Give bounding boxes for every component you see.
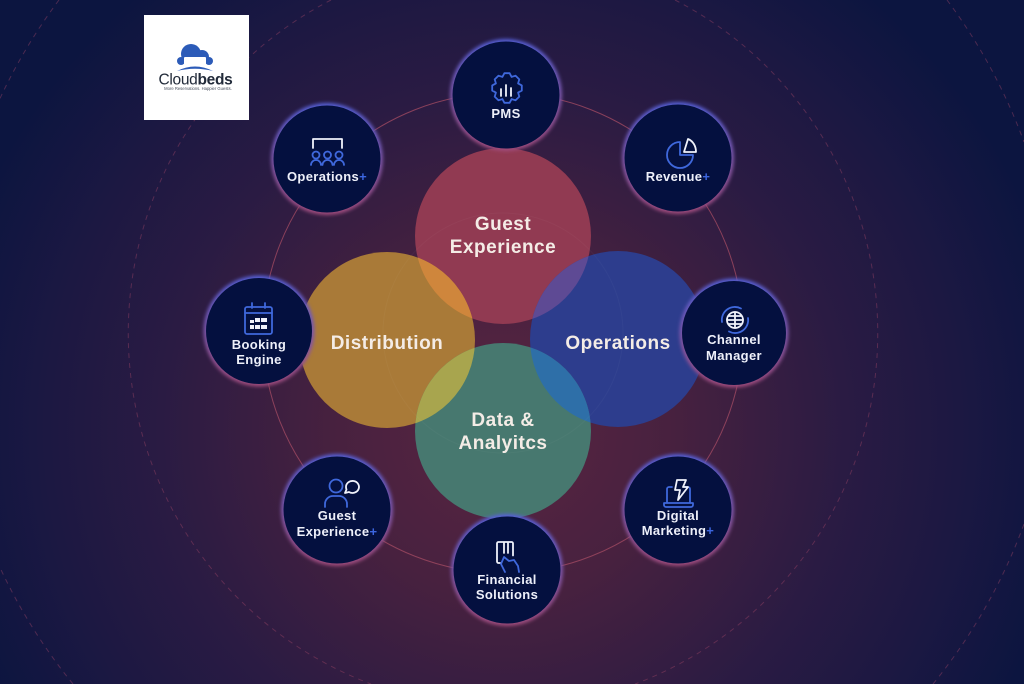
label: Channel Manager: Manager: [706, 348, 762, 363]
label: Booking Engine: Engine: [236, 352, 282, 367]
logo card: [144, 15, 249, 120]
node: Channel Manager: [680, 278, 788, 388]
label: Guest Experience+: Experience+: [297, 524, 377, 539]
node: PMS: [450, 39, 562, 151]
overlap: distribution and data: [415, 348, 475, 424]
node: Guest Experience+: [281, 454, 393, 566]
node: Booking Engine: [204, 276, 314, 386]
label: PMS: PMS: [491, 106, 521, 121]
icon: laptop with bolt: [664, 480, 693, 507]
icon: cloud and bed: [177, 44, 213, 71]
overlap: guest and operations: [532, 256, 588, 319]
label: Revenue+: Revenue+: [646, 169, 710, 184]
icon: pie chart: [667, 139, 696, 168]
label: operations: Operations: [565, 333, 671, 354]
wordmark: Cloudbeds: [159, 72, 232, 88]
icon: team at a board: [311, 139, 344, 165]
panel: overlapping focus circles: [299, 148, 706, 519]
label: Financial Solutions: Solutions: [476, 587, 538, 602]
label: Channel Manager: Channel: [707, 332, 761, 347]
icon: globe with arrows: [722, 307, 748, 333]
label: distribution: Distribution: [331, 333, 443, 354]
icon: hand holding card: [497, 542, 519, 572]
label: data and analytics: Data &: [471, 410, 535, 431]
label: guest experience: Experience: [450, 237, 556, 258]
icon: person with speech bubble: [325, 480, 359, 507]
circle: distribution: [299, 252, 475, 428]
label: Booking Engine: Booking: [232, 337, 286, 352]
circle: data and analytics: [415, 343, 591, 519]
node: Digital Marketing+: [622, 454, 734, 566]
node: Operations+: [271, 103, 383, 215]
circle: operations: [530, 251, 706, 427]
circle: guest experience: [415, 148, 591, 324]
label: Operations+: Operations+: [287, 169, 367, 184]
label: guest experience: Guest: [475, 214, 531, 235]
connecting ring: [263, 93, 743, 573]
overlap: operations and data: [530, 348, 590, 422]
label: Guest Experience+: Guest: [318, 508, 357, 523]
overlap: guest and distribution: [418, 258, 472, 318]
label: Digital Marketing+: Digital: [657, 508, 699, 523]
node: Financial Solutions: [451, 514, 563, 626]
faint inner rings: [383, 213, 623, 453]
node: Revenue+: [622, 102, 734, 214]
tagline: More Reservations. Happier Guests.: [164, 86, 232, 91]
icon: gear with bars: [492, 73, 522, 103]
label: Financial Solutions: Financial: [477, 572, 537, 587]
icon: calendar: [245, 303, 272, 334]
label: Digital Marketing+: Marketing+: [642, 523, 714, 538]
label: data and analytics: Analyitcs: [459, 433, 547, 454]
